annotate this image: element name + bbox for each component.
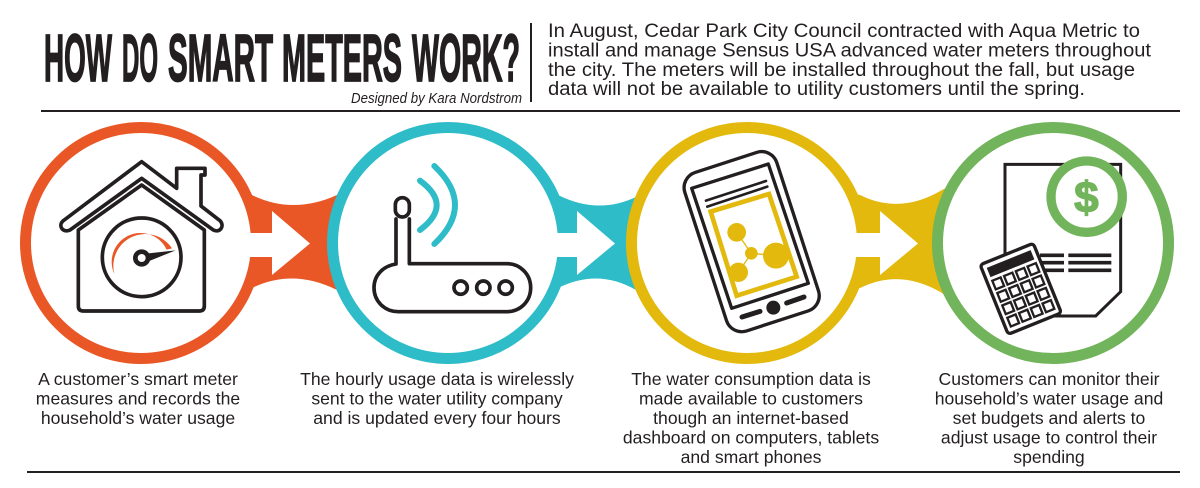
caption: step 1: A customer’s smart meter [38, 369, 238, 389]
caption: step 4: Customers can monitor their [939, 369, 1160, 389]
icon: house with meter [61, 162, 222, 311]
caption: step 2: and is updated every four hours [313, 408, 561, 428]
caption: step 2 [300, 369, 574, 428]
title: HOW [44, 21, 112, 96]
arrow: step 1 to 2 [248, 211, 310, 275]
caption: step 3: made available to customers [639, 388, 863, 408]
caption: step 3: though an internet-based [653, 408, 849, 428]
caption: step 3: dashboard on computers, tablets [623, 428, 879, 448]
caption: step 3: The water consumption data is [631, 369, 871, 389]
caption: step 4: spending [1013, 447, 1085, 467]
intro text block: install and manage Sensus USA advanced water meters throughout [548, 40, 1152, 62]
arrow: step 3 to 4 [855, 211, 918, 275]
byline: Designed by Kara Nordstrom [351, 91, 522, 107]
caption: step 4: household’s water usage and [935, 388, 1163, 408]
caption: step 4: set budgets and alerts to [953, 408, 1146, 428]
connector: orange [245, 190, 345, 296]
intro text block: the city. The meters will be installed throughout the fall, but usage [548, 60, 1135, 81]
icon: bill with calculator [980, 161, 1122, 334]
text: WORK? [412, 21, 520, 96]
intro text block [548, 21, 1152, 100]
caption: step 4: adjust usage to control their [941, 428, 1157, 448]
panel: router [332, 128, 564, 358]
title [44, 21, 520, 96]
intro text block: In August, Cedar Park City Council contracted with Aqua Metric to [548, 21, 1140, 42]
title: SMART [168, 21, 273, 96]
panel: smart phone [632, 128, 862, 358]
icon: smart phone dashboard [680, 147, 823, 336]
caption: step 4 [935, 369, 1163, 467]
connector: teal [552, 190, 645, 296]
intro text block: data will not be available to utility customers until the spring. [548, 79, 1085, 100]
caption: step 2: The hourly usage data is wirelessly [300, 369, 574, 389]
caption: step 3: and smart phones [681, 447, 822, 467]
caption: step 1: measures and records the [36, 388, 240, 408]
caption: step 3 [623, 369, 879, 467]
arrow: step 2 to 3 [555, 211, 615, 275]
caption: step 1: household’s water usage [41, 408, 235, 428]
caption: step 2: sent to the water utility company [311, 388, 563, 408]
panel: bill and budget [938, 128, 1168, 358]
title: DO [122, 21, 158, 96]
caption: step 1 [36, 369, 240, 428]
title: METERS [282, 21, 402, 96]
panel: smart meter [26, 128, 256, 358]
connector: yellow [852, 186, 950, 300]
icon: wireless router [374, 166, 531, 312]
icon: bill with calculator: $ [1074, 173, 1099, 222]
